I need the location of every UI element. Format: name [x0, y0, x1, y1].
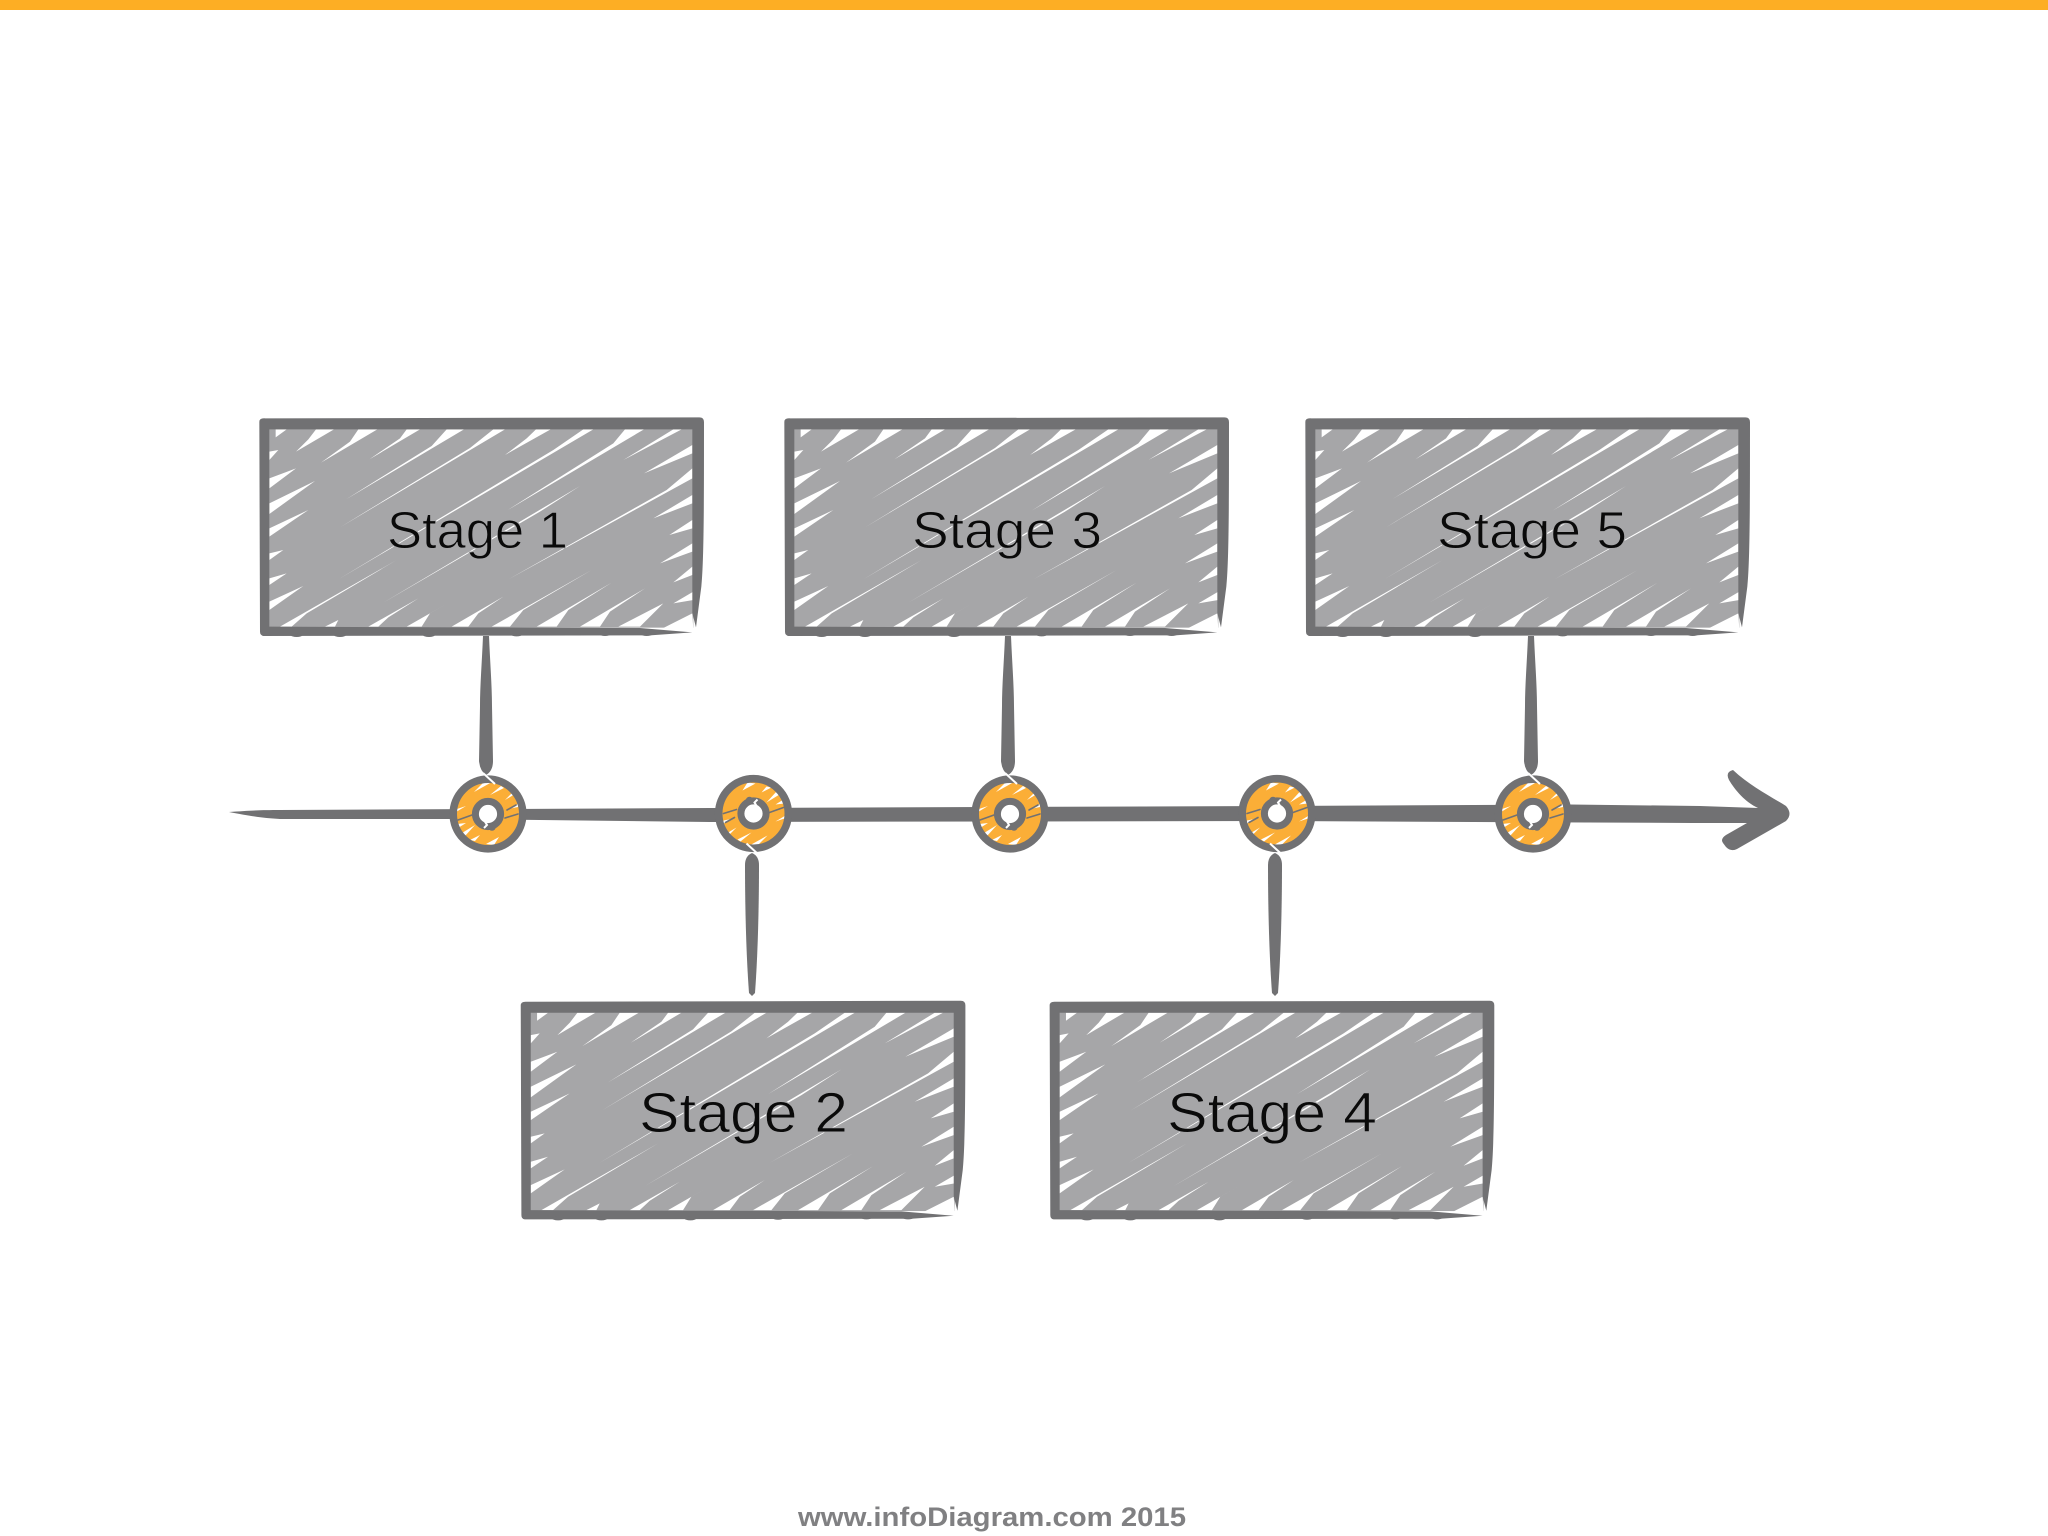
- panel: stage 5: [1305, 417, 1750, 637]
- footer credit: www.infoDiagram.com 2015: [797, 1502, 1186, 1532]
- label: stage 4: Stage 4: [1167, 1081, 1377, 1145]
- marker: stage 2: [719, 779, 788, 854]
- label: stage 2: Stage 2: [639, 1081, 848, 1145]
- connector: stage 2: [745, 853, 759, 996]
- marker: stage 1: [453, 773, 523, 849]
- box: [1305, 417, 1750, 637]
- top accent bar: [0, 0, 2048, 10]
- label: stage 5: Stage 5: [1437, 502, 1627, 560]
- panel: stage 3: [784, 417, 1229, 637]
- label: stage 1: Stage 1: [387, 502, 568, 560]
- marker: stage 4: [1242, 779, 1312, 854]
- box: [784, 417, 1229, 637]
- marker: stage 5: [1498, 773, 1568, 849]
- panel: stage 1: [259, 417, 704, 637]
- connector: stage 3: [1001, 636, 1015, 775]
- label: stage 3: Stage 3: [912, 502, 1102, 560]
- box: [259, 417, 704, 637]
- connector: stage 5: [1524, 636, 1538, 775]
- panel: stage 2: [521, 1001, 965, 1220]
- box: [1050, 1001, 1494, 1220]
- panel: stage 4: [1050, 1001, 1494, 1220]
- connector: stage 1: [479, 636, 493, 775]
- timeline arrow: [229, 770, 1790, 850]
- box: [521, 1001, 965, 1220]
- connector: stage 4: [1268, 853, 1282, 996]
- marker: stage 3: [975, 773, 1045, 849]
